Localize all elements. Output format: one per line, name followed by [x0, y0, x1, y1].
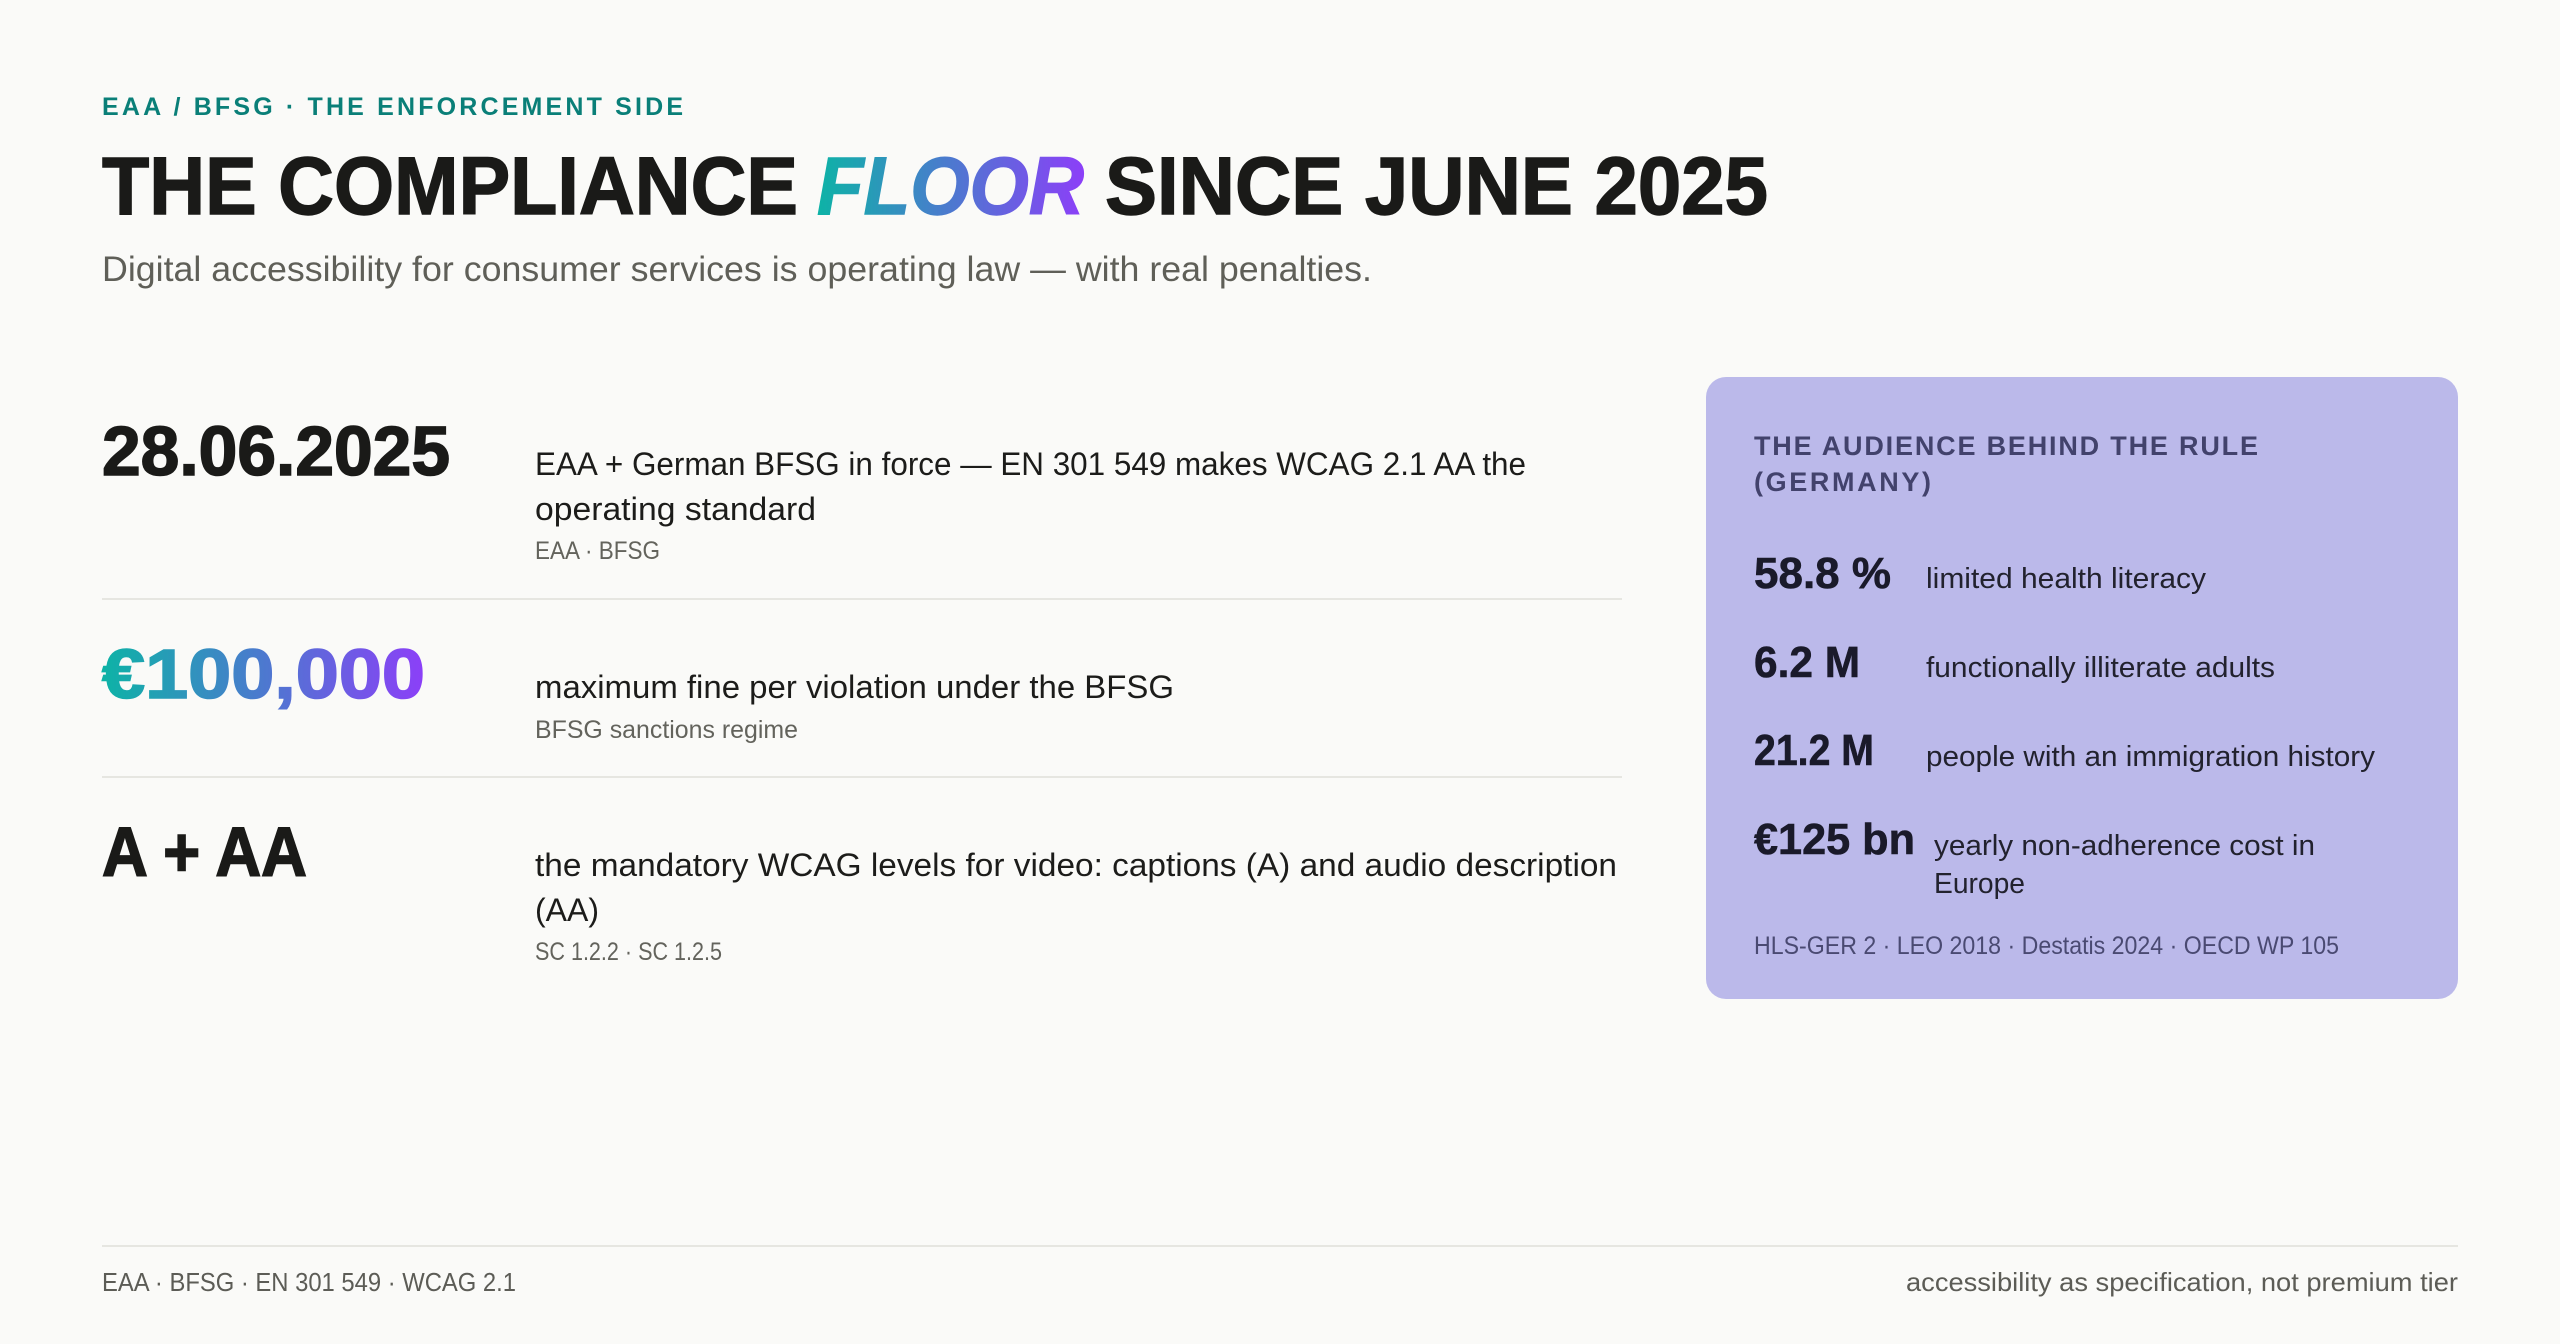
fact row: date in force: EAA + German BFSG in force — EN 301 549 makes WCAG 2.1 AA the — [535, 446, 1526, 482]
header — [102, 93, 1768, 289]
stat: non-adherence cost — [1754, 815, 2315, 900]
subtitle: Digital accessibility for consumer services is operating law — with real penalties. — [102, 250, 1372, 289]
stat: illiterate adults: functionally illiterate adults — [1926, 652, 2275, 684]
stat: non-adherence cost: €125 bn — [1754, 815, 1915, 864]
panel heading: THE AUDIENCE BEHIND THE RULE — [1754, 431, 2258, 461]
panel heading: (GERMANY) — [1754, 467, 1931, 497]
fact row: maximum fine: maximum fine per violation under the BFSG — [535, 669, 1174, 705]
title: SINCE JUNE 2025 — [1105, 141, 1768, 232]
fact row: maximum fine — [102, 635, 1174, 744]
stat: health literacy: 58.8 % — [1754, 549, 1891, 598]
fact row: maximum fine: €100,000 — [102, 635, 425, 713]
footer: accessibility as specification, not premium tier — [1906, 1267, 2458, 1297]
stat: health literacy — [1754, 549, 2207, 598]
footer: EAA · BFSG · EN 301 549 · WCAG 2.1 — [102, 1267, 516, 1297]
title: THE COMPLIANCE — [102, 141, 798, 232]
fact row: date in force: operating standard — [535, 491, 816, 527]
fact row: WCAG levels: A + AA — [102, 813, 307, 891]
panel heading — [1754, 431, 2258, 497]
fact row: maximum fine: BFSG sanctions regime — [535, 716, 798, 744]
panel: enforcement facts — [102, 412, 1622, 966]
fact row: date in force: 28.06.2025 — [102, 412, 450, 490]
title: FLOOR — [817, 141, 1084, 232]
fact row: WCAG levels: (AA) — [535, 892, 599, 928]
panel sources: HLS-GER 2 · LEO 2018 · Destatis 2024 · OECD WP 105 — [1754, 932, 2339, 960]
fact row: date in force: EAA · BFSG — [535, 537, 660, 565]
fact row: WCAG levels: the mandatory WCAG levels for video: captions (A) and audio description — [535, 847, 1617, 883]
stat: immigration history: 21.2 M — [1754, 726, 1874, 775]
title — [102, 141, 1768, 232]
stat: immigration history: people with an immigration history — [1926, 741, 2376, 773]
fact row: date in force — [102, 412, 1526, 565]
stat: non-adherence cost: Europe — [1934, 868, 2025, 900]
stat: non-adherence cost: yearly non-adherence cost in — [1934, 830, 2315, 862]
stat: illiterate adults — [1754, 638, 2275, 687]
stat: immigration history — [1754, 726, 2376, 775]
footer — [102, 1267, 2458, 1297]
fact row: WCAG levels: SC 1.2.2 · SC 1.2.5 — [535, 938, 722, 966]
fact row: WCAG levels — [102, 813, 1617, 966]
eyebrow: EAA / BFSG · THE ENFORCEMENT SIDE — [102, 93, 683, 121]
panel: the audience behind the rule — [1706, 377, 2458, 999]
stat: health literacy: limited health literacy — [1926, 563, 2207, 595]
stat: illiterate adults: 6.2 M — [1754, 638, 1860, 687]
